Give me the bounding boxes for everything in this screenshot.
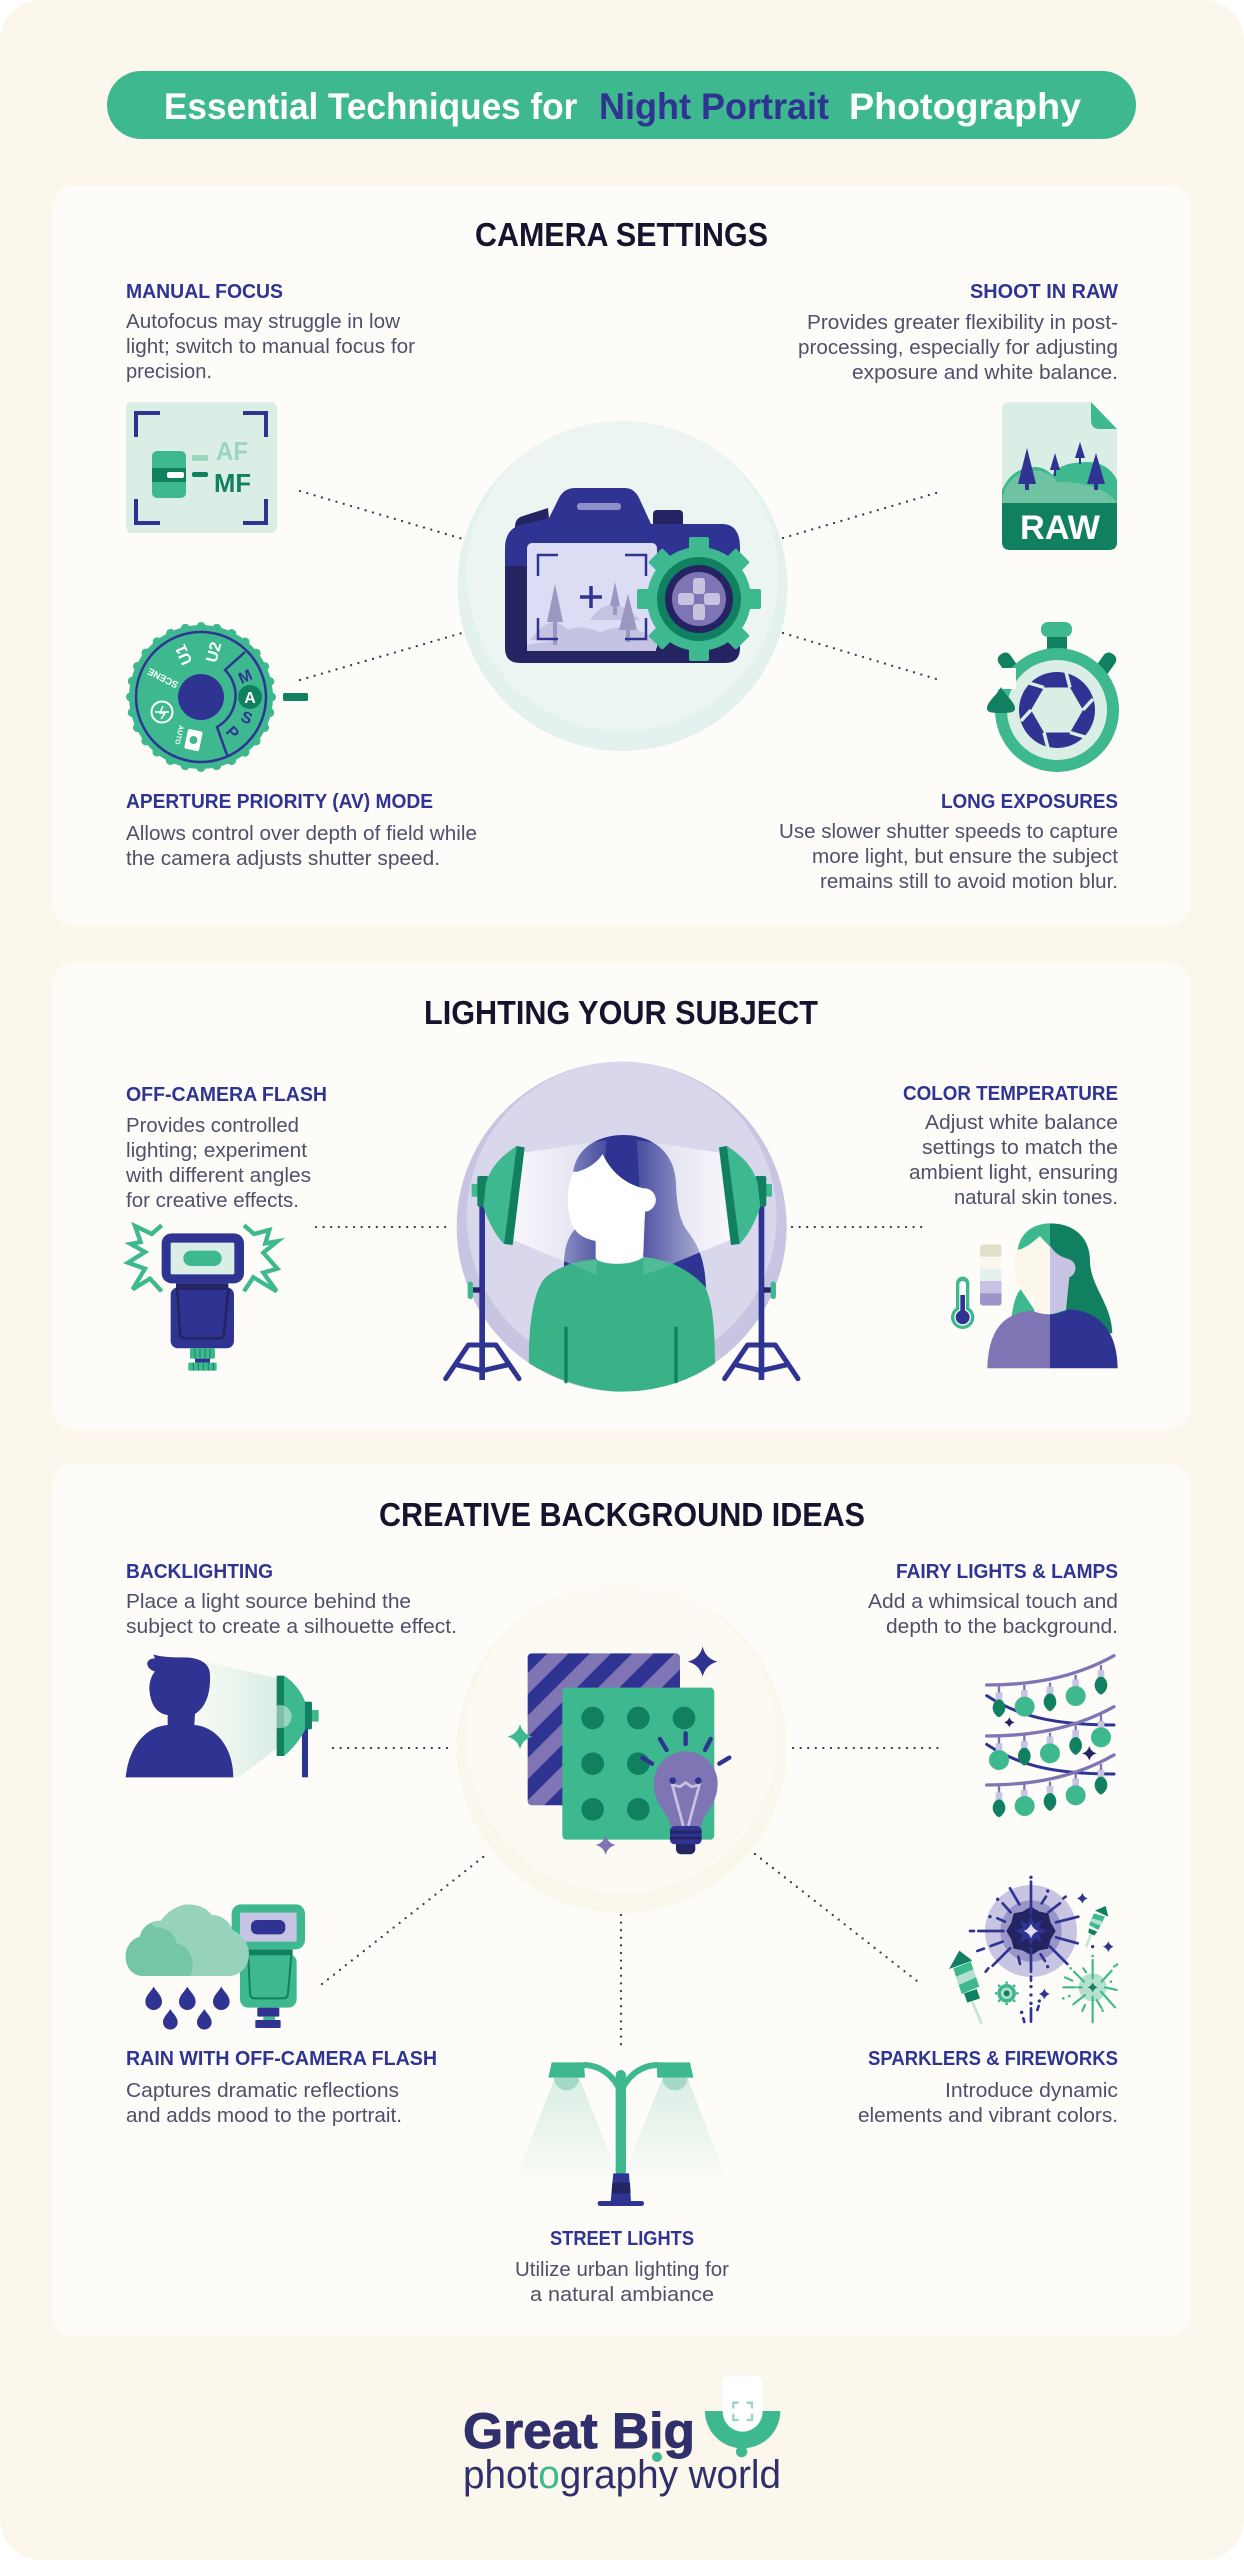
text: manual focus: MANUAL FOCUS (126, 280, 283, 303)
text: long exposures: remains still to avoid motion blur. (820, 870, 1118, 893)
text: shoot in raw (798, 280, 1119, 384)
title banner: Essential Techniques for (164, 86, 587, 127)
title banner (107, 71, 1136, 139)
text: off-camera flash: for creative effects. (126, 1189, 299, 1212)
icon: aperture dial: P (222, 723, 242, 743)
text: shoot in raw: processing, especially for adjusting (798, 336, 1118, 359)
text: backlighting: BACKLIGHTING (126, 1560, 273, 1583)
text: sparklers and fireworks: Introduce dynamic (945, 2079, 1118, 2102)
illustration: camera with gear (458, 419, 788, 751)
text: sparklers and fireworks: SPARKLERS & FIREWORKS (868, 2047, 1118, 2070)
text: color temperature: Adjust white balance (925, 1111, 1118, 1134)
connector lines (300, 491, 943, 681)
text: color temperature (903, 1082, 1118, 1209)
icon: aperture dial: AUTO (173, 724, 184, 746)
text: sparklers and fireworks: elements and vibrant colors. (858, 2104, 1118, 2127)
text: rain with off-camera flash: RAIN WITH OFF-CAMERA FLASH (126, 2047, 437, 2070)
icon: aperture dial: M (236, 667, 255, 688)
text: rain with off-camera flash: and adds mood to the portrait. (126, 2104, 402, 2127)
text: off-camera flash: Provides controlled (126, 1114, 299, 1137)
text: off-camera flash: with different angles (125, 1164, 311, 1187)
text: aperture priority: APERTURE PRIORITY (AV) MODE (126, 790, 433, 813)
icon: aperture dial: U1 (173, 642, 196, 667)
title banner: Night Portrait (599, 86, 839, 127)
text: color temperature: ambient light, ensuring (909, 1161, 1118, 1184)
text: color temperature: COLOR TEMPERATURE (903, 1082, 1118, 1105)
illustration: person with softboxes (446, 1062, 798, 1392)
icon: aperture dial (129, 625, 308, 769)
icon: manual focus switch (126, 402, 277, 533)
text: color temperature: natural skin tones. (954, 1186, 1118, 1209)
icon: manual focus switch: AF (216, 436, 248, 466)
text: fairy lights: FAIRY LIGHTS & LAMPS (896, 1560, 1118, 1583)
text: manual focus: light; switch to manual focus for (126, 335, 415, 358)
text: street lights: STREET LIGHTS (550, 2227, 694, 2250)
heading: creative background ideas: CREATIVE BACKGROUND IDEAS (379, 1497, 865, 1534)
text: shoot in raw: Provides greater flexibility in post- (807, 311, 1118, 334)
text: street lights: a natural ambiance (530, 2283, 714, 2306)
text: off-camera flash (125, 1083, 327, 1212)
panel: lighting your subject (52, 963, 1190, 1429)
icon: street lights (512, 2062, 730, 2206)
icon: aperture dial: SCENE (146, 665, 180, 690)
logo: great big photography world: photography world (463, 2453, 781, 2497)
text: off-camera flash: lighting; experiment (126, 1139, 307, 1162)
text: street lights: Utilize urban lighting for (515, 2258, 729, 2281)
text: backlighting (126, 1560, 457, 1638)
icon: backlit silhouette (126, 1654, 319, 1777)
heading: camera settings: CAMERA SETTINGS (475, 217, 768, 254)
icon: rain cloud and flash (126, 1904, 305, 2030)
text: street lights (515, 2227, 729, 2306)
text: color temperature: settings to match the (922, 1136, 1118, 1159)
text: aperture priority (126, 790, 477, 870)
text: long exposures: LONG EXPOSURES (941, 790, 1118, 813)
text: aperture priority: the camera adjusts shutter speed. (126, 847, 440, 870)
title banner: Photography (849, 86, 1081, 127)
text: long exposures (779, 790, 1118, 893)
text: fairy lights: depth to the background. (886, 1615, 1118, 1638)
text: fairy lights: Add a whimsical touch and (868, 1590, 1118, 1613)
icon: aperture dial: S (238, 708, 255, 728)
text: manual focus: Autofocus may struggle in low (126, 310, 400, 333)
text: fairy lights (868, 1560, 1118, 1638)
text: long exposures: more light, but ensure the subject (812, 845, 1118, 868)
illustration: backdrop and light bulb (457, 1583, 787, 1913)
icon: aperture dial: A (244, 690, 256, 707)
text: aperture priority: Allows control over depth of field while (126, 822, 477, 845)
text: shoot in raw: SHOOT IN RAW (970, 280, 1119, 303)
icon: color temperature person (951, 1223, 1118, 1368)
text: backlighting: subject to create a silhouette effect. (126, 1615, 457, 1638)
text: off-camera flash: OFF-CAMERA FLASH (126, 1083, 327, 1106)
panel: camera settings (52, 186, 1190, 925)
text: sparklers and fireworks (858, 2047, 1118, 2127)
icon: stopwatch (987, 622, 1119, 772)
icon: raw file: RAW (1020, 509, 1101, 547)
icon: manual focus switch: MF (214, 468, 251, 498)
icon: raw file (1002, 402, 1117, 550)
connector lines (322, 1748, 944, 2045)
icon: aperture dial: U2 (204, 640, 225, 664)
logo: great big photography world: Great Big (463, 2403, 695, 2459)
heading: lighting your subject: LIGHTING YOUR SUBJECT (424, 995, 818, 1032)
text: rain with off-camera flash (126, 2047, 437, 2127)
icon: fireworks (949, 1876, 1117, 2022)
icon: flash unit (128, 1225, 277, 1371)
text: manual focus (126, 280, 415, 383)
icon: fairy lights (987, 1656, 1114, 1817)
logo: great big photography world (463, 2376, 781, 2497)
text: shoot in raw: exposure and white balance. (852, 361, 1118, 384)
connector lines (316, 1226, 927, 1228)
text: rain with off-camera flash: Captures dramatic reflections (126, 2079, 399, 2102)
panel: creative background ideas (52, 1464, 1190, 2336)
text: long exposures: Use slower shutter speeds to capture (779, 820, 1118, 843)
text: backlighting: Place a light source behind the (126, 1590, 411, 1613)
text: manual focus: precision. (126, 360, 212, 383)
